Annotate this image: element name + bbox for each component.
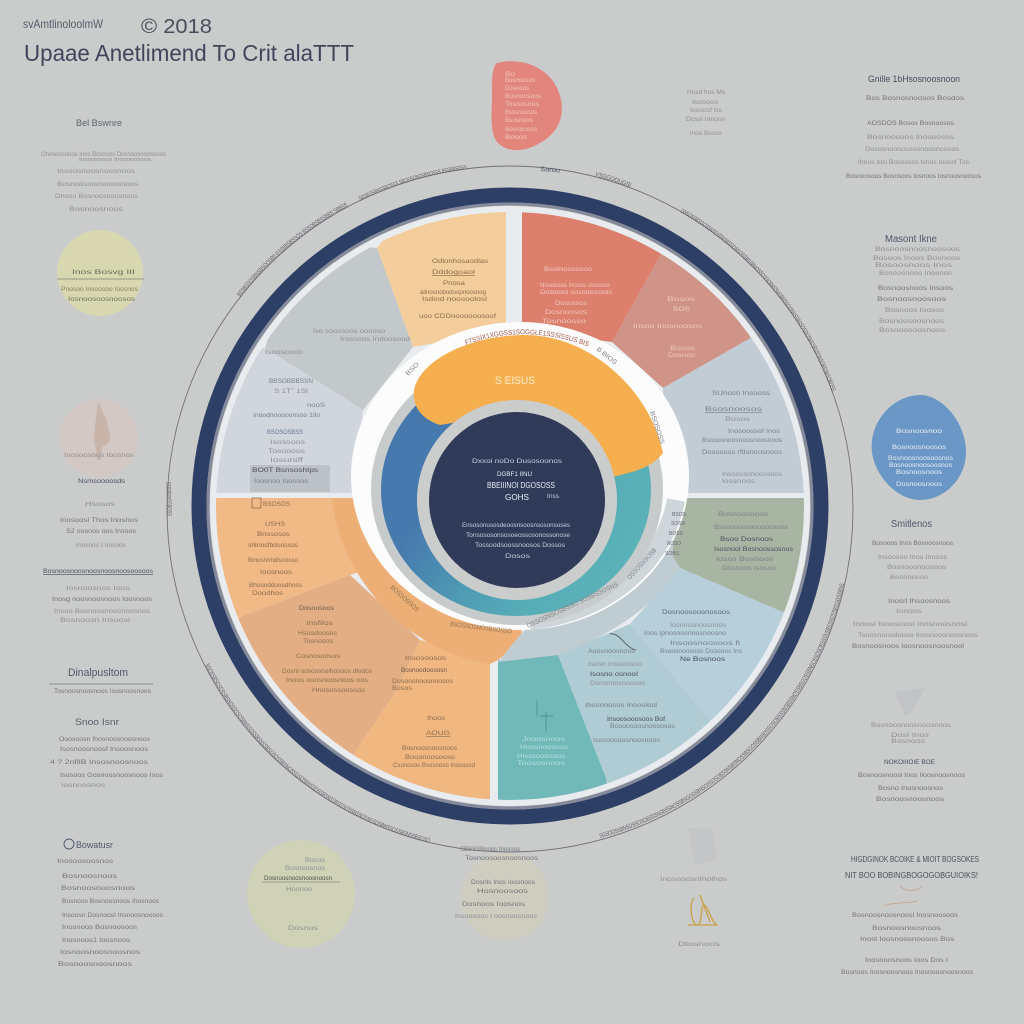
- wedge text: green: Bsooosnosnoosonsoos: [714, 524, 789, 531]
- wedge text: orange middle: Tosnosos: [303, 638, 334, 645]
- circle: pale pink left: Inosoosoos Ioosnos: [64, 452, 135, 459]
- wedge: blue teal pale: [558, 624, 710, 784]
- text block: top left: Bosnoosnoosnoosnoos: [57, 181, 139, 188]
- wedge text: light grey left: Iosuniff: [270, 457, 303, 464]
- wedge text: orange upper left: shtnosfbdoossos: [248, 542, 299, 549]
- text block: lower left one: Isosoos Gosnoosnoosnoos Isos: [60, 772, 164, 779]
- wedge text: pale orange: alinosnobodoopnoosnog: [420, 289, 486, 296]
- text block: right fourth: Bosnoosnoosnoos: [876, 796, 945, 803]
- circle: pale yellow left: [57, 230, 144, 316]
- blob: blue right: Bosnoosnoosos: [892, 444, 947, 451]
- orbit ring with labels: SSOBSSNSBSOS: [166, 482, 174, 516]
- text block: bottom right: [841, 855, 979, 976]
- wedge: grey right: [663, 338, 804, 493]
- text block: right second: Bosoos Inoos Bosnoos: [873, 255, 961, 262]
- blob: blue right: Bosnoosnoosoosnos: [888, 455, 954, 462]
- wedge text: pale blue: Bsoosnoosoos Dsoonos Ins: [660, 648, 743, 655]
- text block: right second: Bosnoosnoosoos: [877, 296, 947, 303]
- blob: red top: Bo: [505, 71, 515, 78]
- text block: lower left one: Iosnoosnos: [61, 782, 106, 789]
- ring labels: BSOSOSS: [648, 410, 665, 446]
- wedge text: green: Iosos Bosnoos: [716, 556, 774, 563]
- wedge text: orange lower: AOUG: [426, 730, 450, 737]
- text block: top right: AOSDOS Bosos Bosnoosos: [867, 120, 955, 127]
- wedge text: grey upper: Irossoos Indoosood: [340, 336, 410, 343]
- wedge text: light grey left: Inoodnooooonsoo 1Ilo: [253, 412, 320, 419]
- wedge text: orange middle: Dosnosoos: [299, 605, 335, 612]
- text block: right second: Bosnoosoosnoos: [879, 327, 946, 334]
- wedge text: pale blue teal: Aoosnoosnoos: [588, 648, 636, 655]
- text block: right third: Insoosoo Inos Inosos: [878, 554, 948, 561]
- wedge text: pale blue: Inos Ipnosoosnoosnoosno: [644, 630, 726, 637]
- blob: red top: Bosnoosos: [505, 77, 536, 84]
- wedge text: pale blue: Iosnoosnoosnoos: [670, 622, 727, 629]
- text block: right second: Bosnoosnoosnoosoos: [875, 246, 961, 253]
- wedge text: red: Dosooso sosnosossos: [540, 289, 613, 296]
- text block: lower left one: Snoo Isnr: [75, 717, 119, 727]
- circle: navy centre: [429, 412, 605, 588]
- circle: pale yellow bottom: Hosnos: [286, 886, 313, 893]
- wedge text: pale blue teal: Bosoosoosnoososos: [610, 723, 676, 730]
- header: title and date: [23, 16, 354, 66]
- wedge text: grey right: Bosos: [725, 416, 751, 423]
- wedge text: orange middle: Hsosdoosos: [298, 630, 338, 637]
- wedge text: orange lower: Csonosos Bsosnoso Inossosd: [393, 762, 475, 769]
- text block: left middle: Nsmsoooosds: [78, 478, 126, 485]
- wedge text: green: Bsoo Dosnoos: [720, 536, 774, 543]
- wedge: muted red: [612, 254, 751, 388]
- text block: right fourth: Bosnoosnoosl Inos Iloosnoosnoos: [858, 772, 966, 779]
- wedge: light grey left: [216, 348, 363, 493]
- wedge text: light grey left: BBSOBBBSSN: [269, 378, 313, 385]
- icon: spike figure: [94, 402, 110, 460]
- wedge text: orange upper left: [248, 498, 303, 597]
- wedge text: teal: Jooosnoos: [522, 736, 566, 743]
- text block: left middle: [43, 478, 154, 624]
- ring labels: BSO: [404, 361, 421, 377]
- blob: blue right: Bosnoosnoos: [896, 469, 943, 476]
- wedge text: light grey left: BSOSOSBSS: [267, 429, 304, 436]
- band: orange crescent: [332, 498, 522, 664]
- band text: stacked white labels: SOSN: [671, 521, 685, 527]
- wedge text: pale orange: Dddogoaol: [432, 269, 476, 276]
- circle: pale peach bottom: Tosnoosoosnoosnoos: [465, 855, 539, 862]
- text block: right fourth: NOKOIIIOIE BOE: [884, 759, 936, 766]
- text block: left middle: Inosg noosnoosnoos Ioosnoos: [52, 596, 153, 603]
- icon: curve line: [610, 634, 636, 650]
- text block: lower left one: Tosnoosnoosnoos Isosnoosnoos: [54, 688, 152, 695]
- circle: pale peach bottom: [455, 846, 549, 941]
- text block: right second: Bosnoos Ioosos: [885, 307, 945, 314]
- ring labels: BSOSSOSNOSBSOSSO: [450, 621, 512, 636]
- blob: red top: Bosnoosoos: [505, 93, 542, 100]
- text block: lower left one: Isosnoosnoosf Insoosnoos: [60, 746, 149, 753]
- text block: right third: [852, 519, 979, 650]
- centre text: DGBF1 IINU: [497, 471, 532, 478]
- text block: lower left two: Bosnoosnoosnoos: [61, 885, 136, 892]
- wedge text: orange lower: Ihoos: [427, 715, 446, 722]
- wedge text: green: [714, 511, 794, 572]
- text block: right second: Bosoosnoos Inos: [875, 262, 953, 269]
- wedge text: light grey left: Tosuooos: [268, 448, 306, 455]
- text block: top middle right: [686, 89, 726, 137]
- wedge text: pale blue teal: Ibosnoosos Inooslosl: [585, 702, 658, 709]
- text block: right third: Inosrl Ihsoosnoos: [888, 598, 951, 605]
- text block: right third: Inoosl Ionosoosl Inosnoosnosl: [853, 621, 968, 628]
- wedge text: orange upper left: BSOSOS: [263, 501, 291, 508]
- wedge: red top: [522, 212, 661, 342]
- circle: pale peach bottom: Dosnls Inos Ioosnoos: [471, 879, 536, 886]
- text block: lower left two: Bosnoos Bosnoosnoos Ihosnoos: [62, 898, 160, 905]
- wedge text: red: Tosnoosso: [542, 318, 587, 325]
- blob: red top: Bosos: [505, 134, 528, 141]
- text block: top left: Insoosnoos Inosnoosnos: [79, 157, 152, 163]
- wedge text: orange lower: Dosoosnoosnoosos: [392, 678, 454, 685]
- circle: pale peach bottom: SBSSSBnoos Inosoos: [460, 846, 521, 853]
- ring labels: F7SSIX1XGGSS1SOGGLE1SSSISSUS BIS: [464, 329, 589, 346]
- text block: top right: Dososnoososoosnoosnoosos: [865, 146, 960, 153]
- wedge text: teal: Hoosnoosoos: [520, 744, 569, 751]
- blob: blue right: [872, 395, 966, 500]
- text block: bottom right: Bosnoos Inosnoosnoos Inosnoosnoosnoos: [841, 969, 974, 976]
- wedge text: pale blue teal: Insoosooosoos Bof: [607, 716, 665, 723]
- wedge text: grey right: Bsosnoosos: [705, 406, 763, 413]
- wedge text: orange upper left: Ioosnoos: [260, 569, 293, 576]
- band text: stacked white labels: BSOS: [672, 512, 687, 518]
- icon block: gold figure bottom: Dtosnoos: [678, 941, 721, 948]
- text block: bottom right: Inosl Ioosnoosnoosos Bos: [860, 936, 955, 943]
- wedge text: grey right: Dosoosos rfllonoosnoos: [702, 449, 783, 456]
- wedge text: pale orange: Pnosa: [443, 280, 465, 287]
- ring: grey: [417, 400, 617, 600]
- wedges: [216, 212, 804, 800]
- centre text: Dosos: [505, 553, 531, 560]
- centre text: Dxxoi noDo Dusosoonos: [472, 458, 563, 465]
- text block: lower left one: Ooosoosn Ihosnoosnoosnoos: [59, 736, 151, 743]
- wedge text: grey upper: Isoosoooo: [265, 349, 303, 356]
- text block: top right: Bosnoosoos lnosoosos: [867, 134, 955, 141]
- blob: red top: [492, 61, 562, 150]
- text block: left middle: Iosnoosnos Ioos: [66, 585, 131, 592]
- text block: right second: Bosoosnoos Inosnos: [879, 270, 953, 277]
- text block: lower left two: [57, 839, 164, 968]
- text block: top middle right: Isosoos: [692, 99, 719, 106]
- text block: right second: Masont Ikne: [885, 234, 937, 245]
- circle: pale yellow bottom: Dosnos: [288, 925, 319, 932]
- text block: lower left two: Bosnoosnoosnoos: [58, 961, 133, 968]
- wedge text: pale blue teal: Isosno osnooI: [590, 671, 638, 678]
- centre text: GOHS: [505, 493, 529, 502]
- wedge text: orange lower: Insosoosos: [405, 655, 447, 662]
- blob: blue right: Dosnoosnoos: [896, 481, 943, 488]
- text block: lower left one: [49, 667, 164, 789]
- ring labels: OSSOSNSOSB: [626, 547, 658, 581]
- header: title and date: Upaae Anetlimend To Crit alaTTT: [24, 40, 354, 66]
- icon block: gold figure bottom: Inosnoosnlholhos: [660, 876, 728, 883]
- icon: faint shape: [895, 688, 925, 716]
- wedge text: red: [540, 266, 613, 325]
- wedge text: grey right: Inosoossof Inos: [728, 428, 781, 435]
- text block: lower left two: Bosnoosnoos: [62, 873, 118, 880]
- wedge text: light grey left: S 1T" 1Sl: [274, 388, 309, 395]
- wedge text: muted red: BOS: [673, 306, 691, 313]
- text block: right third: Tsoosnoosdooso Inosnoosnoosnoos: [858, 632, 979, 639]
- wedge text: light grey left: nooS: [307, 402, 326, 409]
- band text: stacked white labels: [665, 512, 687, 557]
- icon: teal mark: [537, 700, 553, 732]
- orbit ring with labels: SBSBOSBNSSBOSSS SBOSSONSSBSOSSS BSSBBSOSS: [358, 165, 467, 201]
- text block: left middle: Inosoosl Thos Inosnos: [60, 517, 139, 524]
- orbit ring with labels: SGSOOSSBNSOSSOSOBSSSNSBSSNOSSBSGOSSBNSOSSOSOBSSNSBSNOSSBSGOSSBNSOSSOSOBSSSNSBSSNOSSBSGOSSBNSOSSOSOBSSSNSBSSNOSSBSGOSSBNS: [599, 583, 844, 838]
- text block: right third: Ionoos: [896, 608, 923, 615]
- wedge text: grey upper: [265, 328, 410, 356]
- ring: blue to teal: [381, 364, 651, 616]
- centre text: [462, 375, 571, 560]
- text block: left middle: S2 oosnos oos Insoos: [66, 528, 137, 535]
- text block: lower left two: Inosnoos Bosnoosoos: [62, 924, 138, 931]
- centre text: S EISUS: [495, 375, 535, 387]
- text block: right third: Smitlenos: [891, 519, 932, 530]
- wedge text: orange lower: Boosnoosooso: [405, 754, 455, 761]
- wedge text: light grey left: Isossoos: [270, 439, 306, 446]
- wedge text: orange upper left: Bnssosos: [257, 531, 291, 538]
- text block: right third: Bosnoosnoosnos: [887, 564, 947, 571]
- text block: left middle: Bosnoosn Insoosl: [60, 617, 131, 624]
- wedge text: grey right: [702, 390, 783, 485]
- circle: pale yellow left: Inos Bosvg III: [72, 269, 135, 276]
- wedge text: pale blue: Ne Bosnoos: [680, 656, 726, 663]
- text block: bottom right: NIT BOO BOBINGBOGOGOBGUIOIKS!: [845, 871, 978, 880]
- icon block: gold figure bottom: [660, 828, 728, 948]
- wedge text: pale orange: Isdind noosoolosl: [422, 296, 488, 303]
- wedge text: orange lower: Bosnoodoososn: [401, 667, 447, 674]
- text block: lower left one: 4 ? 2nfllB Insosnoosnoos: [50, 759, 149, 766]
- wedge text: muted red: Bosos: [670, 345, 696, 352]
- label box: Isosnso Isossos: [254, 478, 309, 485]
- wedge text: pale orange: uoo CDDnoooooosoof: [419, 313, 496, 320]
- blob: red top: Bosnoosos: [505, 126, 538, 133]
- band text: stacked white labels: BOSS: [669, 531, 684, 537]
- ring labels: B BIOS: [595, 346, 619, 367]
- text block: right fourth: Bosno Inosnoosnos: [878, 785, 944, 792]
- text block: top left: Onosoosnoos Inos Bosnoos Dosnoosnoosnoos: [41, 151, 167, 158]
- wedge text: red: Bsolnosoosos: [544, 266, 593, 273]
- blob: red top: Dosnoos: [505, 85, 530, 92]
- wedge text: pale blue: [644, 609, 743, 663]
- wedge text: light grey left: [250, 378, 330, 492]
- blob: blue right: Bosnoosnoo: [896, 428, 942, 435]
- wedge text: orange lower: Bosos: [392, 685, 413, 692]
- outer navy ring: [199, 195, 821, 817]
- text block: top middle right: Hosd hos Ms: [687, 89, 726, 96]
- text block: top right: Gnille 1bHsosnoosnoon: [868, 74, 960, 84]
- wedge text: pale blue: Insoosnoosoos fl: [670, 640, 741, 647]
- header: title and date: © 2018: [141, 16, 212, 38]
- circle: pale peach bottom: Dosnoos Ioosnos: [462, 901, 526, 908]
- wedge text: teal: Toososnoos: [517, 760, 566, 767]
- text block: top right: Bos Bosnosnoosos Bosdos: [866, 95, 965, 102]
- wedge text: muted red: Insoo Inosnoosos: [633, 323, 703, 330]
- ring labels: BOSSOSSOS: [389, 584, 421, 614]
- circle: pale yellow bottom: Bosos: [305, 857, 326, 864]
- label box: [250, 465, 330, 492]
- text block: top left: [41, 118, 167, 213]
- text block: top left: Insoosnoosnoosnoos: [57, 168, 136, 175]
- band text: stacked white labels: SOBS: [665, 551, 680, 557]
- text block: top right: [846, 74, 982, 180]
- header: title and date: svAmtlinoloolmW: [23, 17, 104, 31]
- wedge text: pale blue: Dosnoosoosnosoos: [662, 609, 731, 616]
- label box: BO0T BsnsoshIps: [252, 467, 319, 474]
- text block: bottom right: HIGDGINOK BCOIKE & MIOIT BOGSOKES: [851, 855, 979, 864]
- orbit ring with labels: Sarou: [540, 166, 561, 174]
- text block: left middle: Insoo Bosnoosnoosnoosnos: [54, 608, 151, 615]
- text block: right second: Bosnoosoosnoos: [879, 318, 945, 325]
- circle: pale pink left: [60, 399, 138, 477]
- text block: top right: Bosnoosoos Bosnsoos Iosnoos Iosnoosnoosos: [846, 173, 982, 180]
- band text: stacked white labels: NOSO: [667, 541, 681, 547]
- text block: lower left two: Inosnoos1 Ioosnoos: [62, 937, 131, 944]
- blob: red top: Tosoosnos: [505, 101, 540, 108]
- blob: red top: Bsosnoosos: [505, 109, 538, 116]
- wedge text: pale orange: Odlonhosaodlas: [432, 258, 489, 265]
- wedge text: teal: Hoosoosnoos: [517, 753, 566, 760]
- centre text: Tossoodsoossnoosos Dossos: [475, 542, 566, 549]
- text block: lower left two: Bowatusr: [76, 840, 113, 850]
- circle: pale yellow left: Pnosoo Insoosoo Ioosnos: [61, 286, 139, 293]
- wedge text: pale orange: [419, 258, 496, 320]
- wedge text: orange upper left: USHS: [265, 521, 286, 528]
- text block: top middle right: Iosoosf lss: [690, 107, 723, 114]
- wedge text: muted red: Bosos: [667, 296, 696, 303]
- text block: bottom right: Bosnoosnoosnoosl Inosnoosoos: [852, 912, 959, 919]
- wedge text: orange middle: Insfilos: [306, 620, 334, 627]
- orbit ring with labels: [166, 165, 854, 852]
- circle: pale yellow bottom: [247, 840, 355, 948]
- wedge text: orange middle: Dosnl oosossoolhosoos dlodos: [282, 668, 373, 675]
- centre text: BBEIIINOI DGOSOSS: [487, 481, 555, 490]
- wedge text: pale blue teal: Isosoosoosnoosnoos: [593, 737, 661, 744]
- orbit ring with labels: VSGGOOUGSI: [596, 172, 632, 187]
- centre text: Ensosonusosdeoosnsoosnsosonsoses: [462, 522, 571, 529]
- text block: top middle right: Dossl Ionosn: [686, 116, 725, 123]
- orbit ring with labels: ONSOSSBSGOSSNSOSSNSBSSONSOSSBSSBNOSSOSSOBNSSNSBNSSOOSNSSBSSOSOOSNSSBSSONSOBSSNSOBOSS: [680, 208, 836, 392]
- wedge text: muted red: [633, 296, 703, 359]
- text block: right fourth: Dosl Inos: [891, 732, 930, 739]
- wedge text: teal: [517, 700, 569, 767]
- text block: top middle right: lnos Bosos: [690, 130, 723, 137]
- wedge text: pale blue teal: Dsosnoosnoosos: [590, 680, 646, 687]
- blob: blue right: Bosnoosnoosoosnos: [889, 462, 953, 469]
- wedge text: orange upper left: Bhosoddoosdhoss: [249, 582, 303, 589]
- text block: right fourth: [858, 688, 966, 803]
- wedge text: orange middle: Cosnosoosos: [296, 653, 341, 660]
- text block: top right: Ihnos Iosl Bosoosos Isnos Ioosnl Tos: [858, 159, 970, 166]
- circle: pale yellow bottom: Dosnoosnoosnoosnoosn: [264, 875, 332, 882]
- wedge text: green: Isosnool Bosnoossosnos: [714, 546, 794, 553]
- wedge text: pale blue teal: [585, 634, 676, 744]
- text block: right second: [873, 234, 961, 334]
- text block: right third: Bosnoosnoos Ioosnoosnoosnool: [852, 643, 965, 650]
- icon: G badge: [64, 839, 74, 849]
- wedge text: green: Dosnoos Isosoo: [722, 565, 776, 572]
- wedge: grey upper left: [265, 240, 413, 410]
- wedge: pale orange top: [377, 212, 506, 347]
- circle: pale yellow left: Iosnoosoosnoosos: [68, 296, 136, 303]
- wedge text: orange upper left: Bmosnnhdlsnosso: [248, 557, 298, 564]
- wedge: orange lower: [353, 640, 490, 800]
- wedge text: red: Dosossos: [555, 300, 588, 307]
- text block: top left: Bosnoosnoos: [69, 206, 124, 213]
- text block: lower left two: Iosnoosnoosnoosnos: [60, 949, 141, 956]
- inner white ring: [351, 322, 689, 630]
- text block: lower left one: Dinalpusltom: [68, 667, 128, 679]
- circle: pale yellow bottom: Bosnoosnos: [285, 865, 326, 872]
- text block: right third: Bosnoosos: [890, 574, 929, 581]
- centre text: Tonsososonsosoeossosonossonose: [466, 532, 570, 539]
- ring labels: [389, 329, 665, 650]
- wedge text: red: Dosnoosos: [545, 309, 588, 316]
- wedge text: pale blue teal: Isosn Insoossoo: [588, 661, 642, 668]
- text block: bottom right: Bosnoosnoosnoos: [872, 925, 942, 932]
- wedge: pale blue: [630, 568, 784, 721]
- wedge: sage green: [673, 498, 804, 612]
- orbit ring with labels: BSSBSSOSBNSBSOOSBS ESSBBSBSSOS BSSOBSBSSBBS SBBSS: [236, 202, 348, 296]
- icon: orange scribble: [884, 886, 922, 906]
- wedge text: grey right: lossnoos: [722, 478, 756, 485]
- wedge text: grey right: Bsooosnoosnoosnoosnoos: [702, 437, 783, 444]
- text block: left middle: Inosnos I oosoos: [76, 542, 127, 549]
- centre donut: [371, 335, 663, 625]
- text block: left middle: Bosnoosnoosnoosnoosnoosoosoos: [43, 568, 154, 575]
- text block: bottom right: Inosnoosnoos Ioos Dos I: [865, 957, 948, 964]
- wedge text: orange middle: [282, 605, 373, 694]
- text block: top left: Bel Bswnre: [76, 118, 122, 128]
- circle: pale peach bottom: Insoosnos I oosnoosnoos: [455, 913, 538, 920]
- wedge text: orange lower: [392, 655, 475, 769]
- text block: right third: Bosnoos Inos Bosnoosnoos: [872, 540, 954, 547]
- wedge text: grey right: SUnosn Insooss: [712, 390, 771, 397]
- text block: top left: Onoso Bosnoosnoosnoos: [55, 193, 139, 200]
- text block: right fourth: Bosnoos: [891, 738, 926, 745]
- wedge text: orange middle: Hnosossoossos: [312, 687, 366, 694]
- wedge text: muted red: Dosnoo: [668, 352, 695, 359]
- wedge text: orange middle: Inoos ooosnoosnoos oos: [286, 677, 369, 684]
- wedge text: grey right: Insoossonoossoos: [722, 471, 783, 478]
- circle: pale peach bottom: Hosnoosoos: [477, 888, 529, 895]
- band: grey blue arc: [498, 542, 680, 662]
- wedge: teal: [498, 655, 610, 810]
- centre text: Inss: [547, 493, 560, 500]
- wedge: orange middle: [238, 575, 420, 755]
- wedge text: orange upper left: Doodhos: [252, 590, 284, 597]
- text block: lower left two: Inosoosoosnos: [57, 858, 114, 865]
- wedge: orange upper left: [216, 498, 358, 618]
- wedge text: red: Nosoosos lnosos ossooss: [540, 282, 611, 289]
- ring labels: OSSOSNSOSBSSO SOSBSSOSNS: [526, 581, 620, 630]
- text block: lower left two: Insoosn Dosnoosl Insnoosnoosos: [62, 912, 164, 919]
- wedge text: grey upper: lso soossoos ooooso: [313, 328, 385, 335]
- text block: right fourth: Bosnoosnoosnoosnoos: [871, 722, 952, 729]
- blob: orange: [414, 335, 663, 477]
- text block: right second: Bosnoosnoos Insoos: [878, 285, 954, 292]
- orbit ring with labels: NSOSSBSGSOSSBSNOSSGSOSBNSSOSSBSNSSBSGSOSSBSNOSSGSOSBNSSOSSBSNSSBSGSOSSBSNOSSGSOSBNSSOSSBSNSSBSGSO: [205, 663, 430, 842]
- text block: left middle: Hsosos: [85, 501, 116, 508]
- wedge text: orange lower: Bosnoosnoosnoos: [402, 745, 458, 752]
- wedge text: green: Bosnoosnoos: [718, 511, 769, 518]
- blob: red top: Bsosnoos: [505, 117, 534, 124]
